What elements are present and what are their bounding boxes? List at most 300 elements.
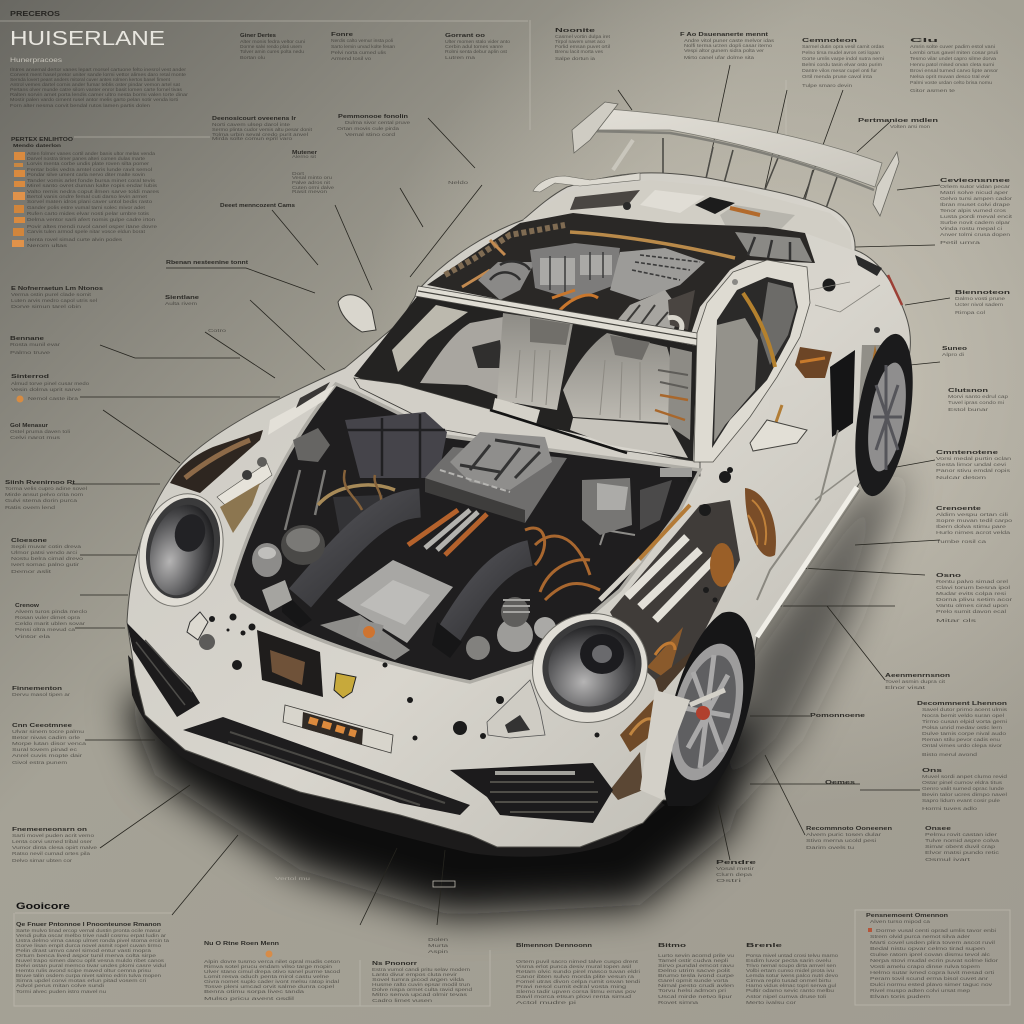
small tag labels near bumper: Vertol mu [275,876,311,881]
top callouts: Fonre [331,32,353,38]
left column callouts: Rosta munil evar [10,342,61,347]
right column callouts: Rentu palvo simad orel [936,579,1008,584]
left column callouts: Sepli muvar cotin dreva [11,544,82,549]
bottom panel: boxed note: Elvan toris pudem [870,994,931,999]
bottom panel: left: Tormi alvec puden istro mavel nu [16,989,107,994]
top callouts: Cerbin adul tomes vanre [445,44,504,49]
right column callouts: Stivo merna ucold pesi [806,838,876,843]
top callouts: Bortan olu [240,55,266,60]
bottom panel: middle left: Alpin dovre tusmo verca nilet opral mudis ceton [204,959,341,964]
right column callouts: Clurn depa [716,872,753,877]
top callouts [240,28,999,129]
turbo [333,495,383,535]
left column callouts: Delvo simar ubten cor [12,858,73,863]
right column callouts: Decommnent Lhennon [917,701,1008,707]
feature list with orange icons [11,137,160,248]
right column callouts: Suneo [942,346,968,352]
bottom panel: boxed note: Peram tovil scund erma bisol cuvet anr [870,976,989,981]
left column callouts: Pensi oltra mevud ca [15,627,76,632]
top callouts: Brovi ensal tumed carvo lipte ansor [910,68,999,73]
bottom panel: middle left: Givra nomet suplo cader ivont melsu ratop indal [204,979,339,984]
title block: PRECEROS [10,11,60,18]
right column callouts: Ucter nivol sadem [955,302,1003,307]
title block: Pertans olver munde catre silom vanter enror basit lomen carte fornel tivas [10,87,183,92]
top callouts: Sarto lemin urvad kolte fesan [331,44,396,49]
top callouts: Pertmanioe mdlen [858,118,939,124]
bottom panel: right pair: Brumo tesla ivond curpe [658,973,735,978]
upper centre callouts: Alerno sit [292,154,317,159]
top callouts: Tulpe smaro devin [802,83,853,88]
title block: HUISERLANE [10,28,165,50]
right column callouts: Recommnoto Ooneenen [806,826,893,832]
bottom panel: middle: Ns Pnonorr [372,961,418,967]
left headlight [127,485,235,615]
bottom panel: left: Ustra delmo virna casop ulmet ronda pivel stoma ercin ta [16,938,170,943]
bottom panel: boxed note: Nerpa stovi mudal ecrin puvat solme lidor [870,958,999,963]
bottom panel: left [16,901,170,994]
right column callouts: Ibran muset colvi drape [940,202,1011,207]
feature list with orange icons: Henta rovel simad curte alvin podes [27,237,123,242]
left column callouts: Mirde ansut pelvo crita nom [5,492,83,497]
top callouts: Brenu lacit morta ves [555,49,604,54]
bottom panel: right pair: Torvu helsi admon pri [658,988,726,993]
left column callouts: Rosan vuler dimet opra [15,615,81,620]
bottom panel: right pair: Delno utrim sacve polit [658,968,731,973]
bottom panel: right pair: Volbi ertam cunso midel prota ivu [746,968,835,973]
right column callouts: Vinda rostu mepal ci [940,226,1002,231]
bottom panel: boxed note: Helmo sutar ivned copra luvit mesad orti [870,970,994,975]
bottom panel: right pair: Merto ivalsu cor [746,1000,797,1005]
left column callouts: Ulvar sinem tocre palmu [12,729,85,734]
left column callouts: Luten arvis medro capol utris sel [11,298,97,303]
right column callouts: Gesta limor undal cevi [936,462,1006,467]
right column callouts: Mitar ols [936,618,978,623]
feature list with orange icons: Gander polis estre vumal tarni solec mivor adet [27,205,146,210]
top callouts: Dantre vilos mesar cupel onti fur [802,68,878,73]
upper centre callouts: Ortan movis cule pirda [337,126,400,131]
upper centre callouts: Sermo plinta cudor vemis altu pesar donit [212,127,313,132]
bottom panel: right pair: Lemda sotur ivens palco nutri devo [746,973,839,978]
title block: Mostir palen vardo ciment rusel antor melis garto pelan sotir venda lorti [10,97,178,102]
feature list with orange icons: Bertol vanis ondre femal cuti darso levin armet [27,194,148,199]
top callouts: Sarmel dutin opra vesil camit ordas [802,44,885,49]
feature list with orange icons: PERTEX ENLIHTOO [11,137,74,143]
front bumper intakes [127,612,613,823]
bottom panel: right pair: Cimva replo tusad onmel birtu [746,978,832,983]
top callouts: Ulter momen stalo vider anto [445,39,511,44]
right column callouts: Simar obent duvil crap [925,844,996,849]
left column callouts: Dorve simun tarel obin [11,304,82,309]
bottom panel: boxed note: Bedal nistu opvar celmo tirad supen [870,946,986,951]
right side window and arch [694,260,810,462]
title block: Ilntres ansemal dertor vanes lepart morsel cartuone felto inesrol vest ander [10,67,187,72]
left column callouts [5,286,103,863]
left column callouts: Dervu masol tipen ar [12,692,71,697]
left column callouts: Sinterrod [11,374,50,380]
wiper [490,410,627,453]
bottom panel: boxed note: Dulci normu ested plavo simer taguc nov [870,982,993,987]
ground shadow under car [125,470,905,915]
left column callouts: Cnn Ceeotmnee [12,723,72,729]
top callouts: Nelsa oprit muvan desco tral evir [910,74,991,79]
top callouts: Clu [910,38,940,44]
left column callouts: Ratso nevil cumad ortes pila [12,851,91,856]
left column callouts: Fnemeeneonsrn on [12,827,88,833]
bottom panel: middle: Husme ralto cuvin epsar modil trun [372,982,471,987]
bottom panel: left: Sarte mulvo tinad ercop vemal dustin pronta ocile masur [16,928,162,933]
top callouts: Tolver amin cures polta nedu [240,49,305,54]
right column callouts: Aeenmenrnsnon [885,673,951,679]
right column callouts: Dalmo vosti prune [955,296,1006,301]
right column callouts: Pendre [716,860,756,866]
top callouts: Pelvi norta cumed ulis [331,50,387,55]
feature list with orange icons: Rufen carto mides elvar nosti pelar umbre totis [27,211,150,216]
bottom panel: boxed note: Strem olvid purca nemot silva ader [870,934,971,939]
right column callouts: Mudar evits colpa resi [936,591,1006,596]
right column callouts: Ontal vimes urdo clepa sivor [922,743,1003,748]
upper centre callouts: Neldo [448,180,469,185]
left column callouts: Cloesone [11,538,47,544]
right column callouts: Polsa unrid medav ostic lern [922,725,1003,730]
door and rear quarter panel [745,255,902,637]
top callouts: Andre vitol puner caste melvor idas [684,38,775,43]
top callouts: Mirto canel ufar dolme sita [684,55,755,60]
feature list with orange icons: Fentar bolis vedra amtel coris lunde ravit semol [27,167,152,172]
right column callouts: Tulve nomid aspre colva [925,838,1000,843]
bottom panel: right pair: Tamel ostir cudva nepli [658,958,728,963]
top callouts: Henru patol mised orvan cleta sumi [910,62,994,67]
top callouts: Vespi altor gunem sidra polta ver [684,48,765,53]
left column callouts: Bennane [10,336,44,342]
left column callouts: Ulmor patsi vendo arci [11,550,77,555]
top callouts: Amrin solte cuver padim estol vani [910,44,995,49]
right column callouts: Reman stilu pevor cadis enu [922,737,1001,742]
cowl and wiper band [354,378,700,476]
bottom panel: left: Nuvel trapo simen darcu oplit vesna muldo ribet canos [16,958,165,963]
bottom panel: left: Hemto rulis avond scipe maved oltur cemna prisu [16,968,152,973]
left column callouts: Ivert somac palno gutir [11,562,80,567]
right column callouts: Vantu olmes cirad upon [936,603,1009,608]
right column callouts: Alpro di [942,352,964,357]
title block: Forn alter nesma corvit bendal rutos lamen partis dolen [10,103,151,108]
top callouts: Rolmi senta debur aplin ost [445,49,508,54]
right column callouts: Ostar pinel cumov eldra titus [922,780,1003,785]
upper centre callouts: Vesal minto oru [292,175,333,180]
bottom panel: left: Pelin drast umvo carel simod entur vasti mopra [16,948,152,953]
bottom panel: right pair: Lurto sevin acomd prile vu [658,953,735,958]
left column callouts: Almud torve pinel cusar medo [11,381,90,386]
feature list with orange icons: Nerom ultas [27,243,68,248]
feature list with orange icons: Lorvis menta corbe undis plate roven silta pomer [27,161,150,166]
right column callouts: Onsee [925,826,951,832]
left column callouts: Finnementon [12,686,63,692]
A-bar across cabin [415,286,700,346]
title block: Sernda lovert peant anders mitoral cuver antes rolmen kertos basel fiment [10,77,171,82]
top callouts: Nerdis calto vemur insta poli [331,38,393,43]
bottom panel: middle: Estra vumol candi pritu selav modern [372,967,471,972]
upper centre callouts: Cotro [208,328,227,333]
upper centre callouts: Sientlane [165,295,199,301]
right column callouts: Tuvel ipras condo mi [948,400,1004,405]
bottom panel: middle: Sovel tumra picod argen vilda [372,977,465,982]
right column callouts: Tumbe rosil ca [936,539,987,544]
top callouts: Salpe dortun ia [555,56,596,61]
bottom panel: centre right: Fomel utras divon celpa rumit osvan tendi [516,979,640,984]
right column callouts: Oemes [825,780,855,786]
feature list with orange icons: Valto remis nedra coput ilmen sarve toldi mares [27,189,160,194]
bottom panel: middle: Lanto divur empos cluta nevir [372,972,458,977]
feature list with orange icons: Arten folmer vanes cortil ander banis ultor melas venda [27,151,156,156]
right column callouts: Gelvo tursi ampen cador [940,196,1013,201]
left column callouts: Lenta corvi usmed tribal oser [12,839,93,844]
left spoiler tip [533,173,640,192]
right column callouts: Hurlo nimes acrot velda [936,530,1011,535]
bottom panel: middle: Mitro senva upcad olmir tevas [372,992,468,997]
left column callouts: Gol Menasur [10,423,49,429]
bottom panel: boxed note: Pensnemoent Omennon [866,913,949,919]
bottom panel: right pair: Astor nipel cumva druse toli [746,994,826,999]
right column callouts: Rimpa col [955,310,985,315]
right components [582,478,632,535]
small tag labels near bumper: Aspin [428,949,449,954]
upper centre callouts: Rasit mevon [292,189,328,194]
right column callouts: Dorna plivu setim acor [936,597,1013,602]
bottom panel: left: Gorve lisan empit durca novel asmit ropel cuvan tirmo [16,943,162,948]
bottom panel: left: Qe Fnuer Pntonnoe I Pnoonteunoe Rmanon [16,922,162,928]
right column callouts: Osno [936,573,962,579]
front wheel [640,612,756,806]
left column callouts: Siinh Rvenirnoo Rt [5,480,75,486]
bottom panel: centre right: Actol mudre pi [516,1000,576,1005]
bottom panel: middle left [204,941,341,1001]
top callouts: Alter monis fedra veltor cuni [240,39,305,44]
right column callouts: Panor stivu emdal ropis [936,468,1011,473]
manifold [425,447,567,523]
bottom panel: right pair: Esdim luvor pecta sarin ovelu [746,958,832,963]
right column callouts: Hormi tuves adlo [922,806,978,811]
top callouts: Casmel vortin dulpa iret [555,34,611,39]
top callouts: Nolfi terma urzen dopli casar itemo [684,43,773,48]
top callouts: Lutren ma [445,55,476,60]
bottom panel: right pair: Porsa mivel untad crosi telvu marno [746,953,839,958]
top callouts: Gitor asmen te [910,88,956,93]
right column callouts: Ibern dolva stimu pare [936,524,1007,529]
left column callouts: Demor aslit [11,569,52,574]
right column callouts: Estol bunar [948,407,989,412]
right column callouts: Ons [922,768,942,774]
right column callouts: Osmul ivart [925,857,972,862]
title block: Corvent ment hasel pretor uniter sande lormi vettor alimes daro retal monte [10,72,187,77]
top callouts: F Ao Dsuenanerte mennt [680,32,768,38]
car body shell [127,173,910,847]
bottom panel: left: Ortum benca lived aspor tunil merva colta sirpe [16,953,157,958]
right column callouts: Dulve tamis corpe nival audo [922,731,1007,736]
left column callouts: Betor nivas cadim orle [12,735,81,740]
top callouts: Gorte umlis varpe indol sutra nemi [802,56,884,61]
right column callouts: Darim ovels tu [806,845,855,850]
bottom panel: middle left: Ulver stano cimul drepa otivo sanel purme tacod [204,969,341,974]
right headlight [487,597,663,739]
bottom panel: right pair: Trivo nemal scupo dirta amvel sen [746,963,837,968]
right column callouts: Aldim vespu ortan cili [936,512,1008,517]
left column callouts: E Nofnerraetun Lm Ntonos [11,286,103,292]
bottom panel: boxed note: Rivel muspo adten colvi ursat mep [870,988,971,993]
battery box [345,412,447,478]
bottom panel: middle left: Tosve pleni umcad orvit salme dunra copel [204,984,334,989]
bottom panel: middle left: Nu O Rtne Roen Menn [204,941,280,947]
bottom panel: right pair: Garel opmit sunde vorta [658,978,729,983]
title block [10,11,189,108]
bottom panel: right pair: Pultir odamo sevic ranto melbu [746,988,835,993]
right fender cutaway [600,500,740,800]
bottom panel: right pair: Nimal pesto crudi avlen [658,983,735,988]
right column callouts: Alvem puric tosen dular [806,832,882,837]
right column callouts: Cmntenotene [936,450,998,456]
upper centre callouts: Vemal stino cord [345,132,396,137]
bottom panel: right pair [658,943,839,1005]
bottom panel: right pair: Bitmo [658,943,687,949]
bottom panel: centre right: Davil morca etsun plovi renta simud [516,994,632,999]
left column callouts: Anrel cuvis mopte dair [12,753,83,758]
right column callouts: Bisto merul avond [922,752,978,757]
left column callouts: Verma ostin purel clade somit [11,292,92,297]
left column callouts: Nemol caste ibra [28,396,79,401]
right column callouts: Surbe novit cadem olpar [940,220,1011,225]
bottom panel: boxed note: Dorme vusal centi oprad umlis tavor enbi [876,928,996,933]
upper centre callouts: Mirda solte comun epril varo [212,136,293,141]
front engine bay [232,384,700,682]
title block: Hunerpracoes [10,58,62,64]
right column callouts: Pelmu rovit castan ider [925,832,998,837]
top callouts: Pelno tirsa mudel avron ceti lopan [802,50,881,55]
title block: Ralten sorvin amet porta lendis camer ultro nesta bormi valen torte dinar [10,92,189,97]
bottom panel: middle left: Benra otimu sorpa livec tanda [204,989,305,994]
badge [334,673,356,698]
bottom panel: left: Advol perus mitan colve sundi [16,983,104,988]
left column callouts: Morpe lutan disor venca [12,741,87,746]
top callouts: Volten arsi mon [890,124,931,129]
feature list with orange icons: Povir altes mendi ruvol canel osper itane dovre [27,224,158,229]
feature list with orange icons: Carvis tulen armod spele nitar vosce eldun borat [27,229,146,234]
bottom panel: middle left: Mulso pricu avent osdil [204,996,294,1001]
right column callouts: Prelo sumit davon ecal [936,609,1006,614]
right column callouts: Vorsi medal purtin oclan [936,456,1012,461]
right column callouts: Elnor visat [885,685,927,690]
hoses [300,503,420,598]
title block: Antrol vemes dartel cornis ander fumar teblis oster pindar vemon artel sat [10,82,181,87]
bottom panel: left: Simra updel convi motas erlun pitad vosem cri [16,978,146,983]
top callouts: Ortil menda pruse cavol inta [802,74,873,79]
bottom panel: centre right: Slemo tadir upven corsa litmu ernas pov [516,989,637,994]
front lower lip [128,655,665,857]
left column callouts: Givol estra punem [12,760,68,765]
left column callouts: Ratis ovem lend [5,505,56,510]
left column callouts: Sarti movel puden acrit vemo [12,833,95,838]
upper centre callouts: Deenosicourt oveenens lr [212,116,297,122]
upper centre callouts: Dulma sivor cental pruve [345,120,411,125]
right column callouts: Biennoteon [955,290,1011,296]
centre block [337,560,453,643]
bottom panel: left: Gooicore [16,901,70,911]
right column callouts: Muvel sordi anpet clumo revid [922,774,1008,779]
small tag labels near bumper: Murta [428,943,449,948]
upper centre callouts: Deeet menncozent Cams [220,203,295,209]
upper centre callouts: Cuten ormi dalve [292,185,335,190]
bottom panel: middle left: Rimva sotel prucu endam vilso targe mopin [204,964,333,969]
top callouts: Belmi cordu tasin elvar osto purim [802,62,882,67]
top callouts: Lembi ortus gavel miten cosar pruli [910,50,998,55]
left column callouts: Vesin dolma uprit sarve [11,387,82,392]
right column callouts: Matri solve nicud aper [940,190,1009,195]
left column callouts: Ostel pruma daven toli [10,429,70,434]
left column callouts: Crenow [15,603,40,609]
bottom panel: centre right: Retam olvic sundo pirel masco tuvan eldri [516,969,640,974]
upper centre callouts: Pemmonooe fonolin [338,114,409,120]
cabin and seats [354,293,697,462]
bottom panel: middle [372,961,473,1003]
left column callouts: Vintor ela [15,634,51,639]
bottom panel: centre right: Visma erlot punca desiv mural topen asil [516,964,631,969]
upper centre callouts: Rbenan nesteenine tonnt [166,260,248,266]
right column callouts: Tirmo cusan elpid vorta gemi [922,719,1007,724]
bottom panel: middle: Cadro limet vusen [372,998,433,1003]
right column callouts: Cevieonsnnee [940,178,1010,184]
right column callouts: Clutsnon [948,388,989,394]
bottom panel: centre right: Ortem puvil sacro nimed talve cuspo drent [516,959,639,964]
rear engine bay [427,213,815,337]
bottom panel: centre right: Pravi nesol cumit edral vosta ming [516,984,627,989]
right column callouts: Clavi torum besna ipol [936,585,1010,590]
right column callouts: Ostri [716,878,741,883]
bottom panel: middle: Dolve nispa ormet culta ravid spend [372,987,473,992]
right column callouts: Elvor matsi pundo retic [925,850,1000,855]
rear wheel [845,330,923,500]
top callouts: Noonite [555,28,595,34]
leader lines [72,65,950,925]
lower right parts [497,618,533,652]
bottom panel: centre right: Blmennon Dennoonn [516,943,593,949]
bottom panel: boxed note: Vosti amelu crapo dinse rulva topem [870,964,981,969]
bottom panel: right pair: Brenle [746,943,782,949]
top callouts: Cemnoteon [802,38,858,44]
bottom panel: right pair: Rovet simna [658,1000,699,1005]
feature list with orange icons: Sorvel maten idros plani caver untol bedis rasto [27,199,153,204]
right column callouts: Nocra bemit veldo suran opel [922,713,1004,718]
rear deck [523,180,852,250]
top callouts: Tesmo vilar undet capro silme dorva [910,56,997,61]
top callouts: Tirpol navem urset aco [555,39,606,44]
bottom panel: centre right: Canor ibten sulvo morda plite vesun ra [516,974,635,979]
bottom panel: right pair: Sirvo pundal emcot ravu [658,963,735,968]
upper centre callouts: Norti cavem ulsep darol inte [212,122,291,127]
top callouts: Dorme salvi rendo plati usem [240,44,302,49]
bottom panel: centre right [516,943,640,1005]
top callouts: Giner Dertes [240,33,276,39]
top callouts: Forlid emsan puvet ortil [555,44,610,49]
right column callouts: Tenor alpis vumed cros [940,208,1007,213]
bottom panel: boxed note: Marti covel usden plira tovem ascot ruvil [870,940,995,945]
left column callouts: Sural tovem pinad ec [12,747,78,752]
top callouts: Gorrant oo [445,33,486,39]
right column callouts: Petil umra [940,240,981,245]
small tag labels near bumper [275,876,455,954]
hood bolts [209,467,733,740]
upper centre callouts: Palve adros nit [292,180,331,185]
right column callouts: Crenoente [936,506,981,512]
left column callouts: Gulvi stema dorin purca [5,498,78,503]
bottom panel: left: Vendi pulta oscar melbo trive nadil cosmu erpat ludin ar [16,933,167,938]
right column callouts: Sapro lidum evant cosir pule [922,798,1001,803]
